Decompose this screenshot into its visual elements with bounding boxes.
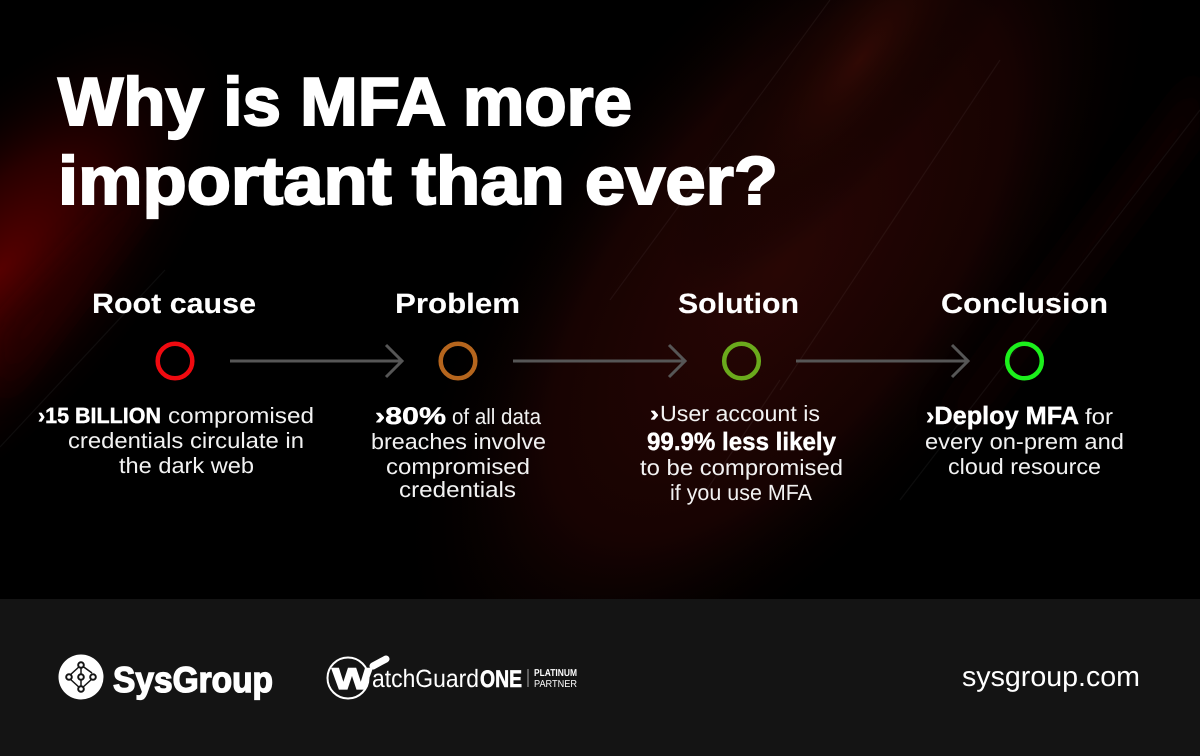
icon: W badge: W bbox=[332, 663, 373, 696]
text: user account less likely: User account is bbox=[660, 401, 820, 426]
text: deploy MFA bbox=[925, 402, 1124, 479]
icon: W badge bbox=[328, 658, 386, 698]
status circle: bright green bbox=[1007, 344, 1042, 378]
text: 80 percent of breaches: compromised bbox=[386, 454, 530, 479]
column: solution bbox=[640, 288, 843, 505]
text: user account less likely bbox=[640, 401, 843, 505]
text: user account less likely: to be compromised bbox=[640, 455, 843, 480]
label: partner: PARTNER bbox=[534, 679, 577, 690]
text: deploy MFA: for bbox=[1085, 404, 1113, 429]
heading: root cause: Root cause bbox=[92, 288, 256, 319]
status circle: red bbox=[158, 344, 192, 378]
text: deploy MFA: every on-prem and bbox=[925, 429, 1124, 454]
title: Why is MFA more bbox=[58, 64, 632, 140]
text: 80 percent of breaches: of all data bbox=[452, 404, 542, 429]
status circle: olive green bbox=[724, 344, 759, 378]
wordmark: SysGroup: SysGroup bbox=[113, 659, 273, 700]
logo: WatchGuard ONE Platinum Partner bbox=[328, 658, 577, 698]
column: root cause bbox=[38, 288, 314, 478]
heading: solution: Solution bbox=[678, 288, 799, 319]
background panel bbox=[0, 0, 1200, 600]
text: user account less likely: if you use MFA bbox=[670, 480, 812, 505]
wordmark: ONE: ONE bbox=[480, 666, 522, 693]
logo: SysGroup bbox=[58, 654, 273, 700]
column: problem bbox=[371, 288, 546, 502]
heading: conclusion: Conclusion bbox=[941, 288, 1108, 319]
text: 15 billion credentials: ›15 BILLION bbox=[38, 403, 161, 428]
text: 15 billion credentials: credentials circulate in bbox=[68, 428, 304, 453]
title: important than ever? bbox=[58, 143, 778, 219]
footer panel bbox=[0, 599, 1200, 756]
text: 80 percent of breaches: breaches involve bbox=[371, 429, 546, 454]
text: 15 billion credentials bbox=[38, 403, 314, 478]
arrow: root cause to problem bbox=[230, 345, 402, 377]
text: user account less likely: 99.9% less likely bbox=[647, 428, 836, 456]
text: deploy MFA: ›Deploy MFA bbox=[926, 402, 1079, 430]
arrow: problem to solution bbox=[513, 345, 685, 377]
text: deploy MFA: cloud resource bbox=[948, 454, 1101, 479]
icon: network badge bbox=[58, 654, 104, 700]
title bbox=[58, 64, 778, 219]
text: 15 billion credentials: the dark web bbox=[119, 453, 254, 478]
status circle: amber bbox=[441, 344, 475, 378]
divider bbox=[527, 669, 529, 687]
heading: problem: Problem bbox=[395, 288, 520, 319]
arrow: solution to conclusion bbox=[796, 345, 968, 377]
text: 80 percent of breaches: credentials bbox=[399, 477, 516, 502]
text: 15 billion credentials: compromised bbox=[168, 403, 314, 428]
label: platinum: PLATINUM bbox=[534, 668, 577, 679]
text: 80 percent of breaches bbox=[371, 403, 546, 502]
text: user account less likely: › bbox=[650, 401, 659, 426]
column: conclusion bbox=[925, 288, 1124, 479]
text: 80 percent of breaches: ›80% bbox=[375, 403, 446, 430]
website: sysgroup.com bbox=[962, 661, 1140, 692]
wordmark: WatchGuard: atchGuard bbox=[372, 665, 479, 693]
